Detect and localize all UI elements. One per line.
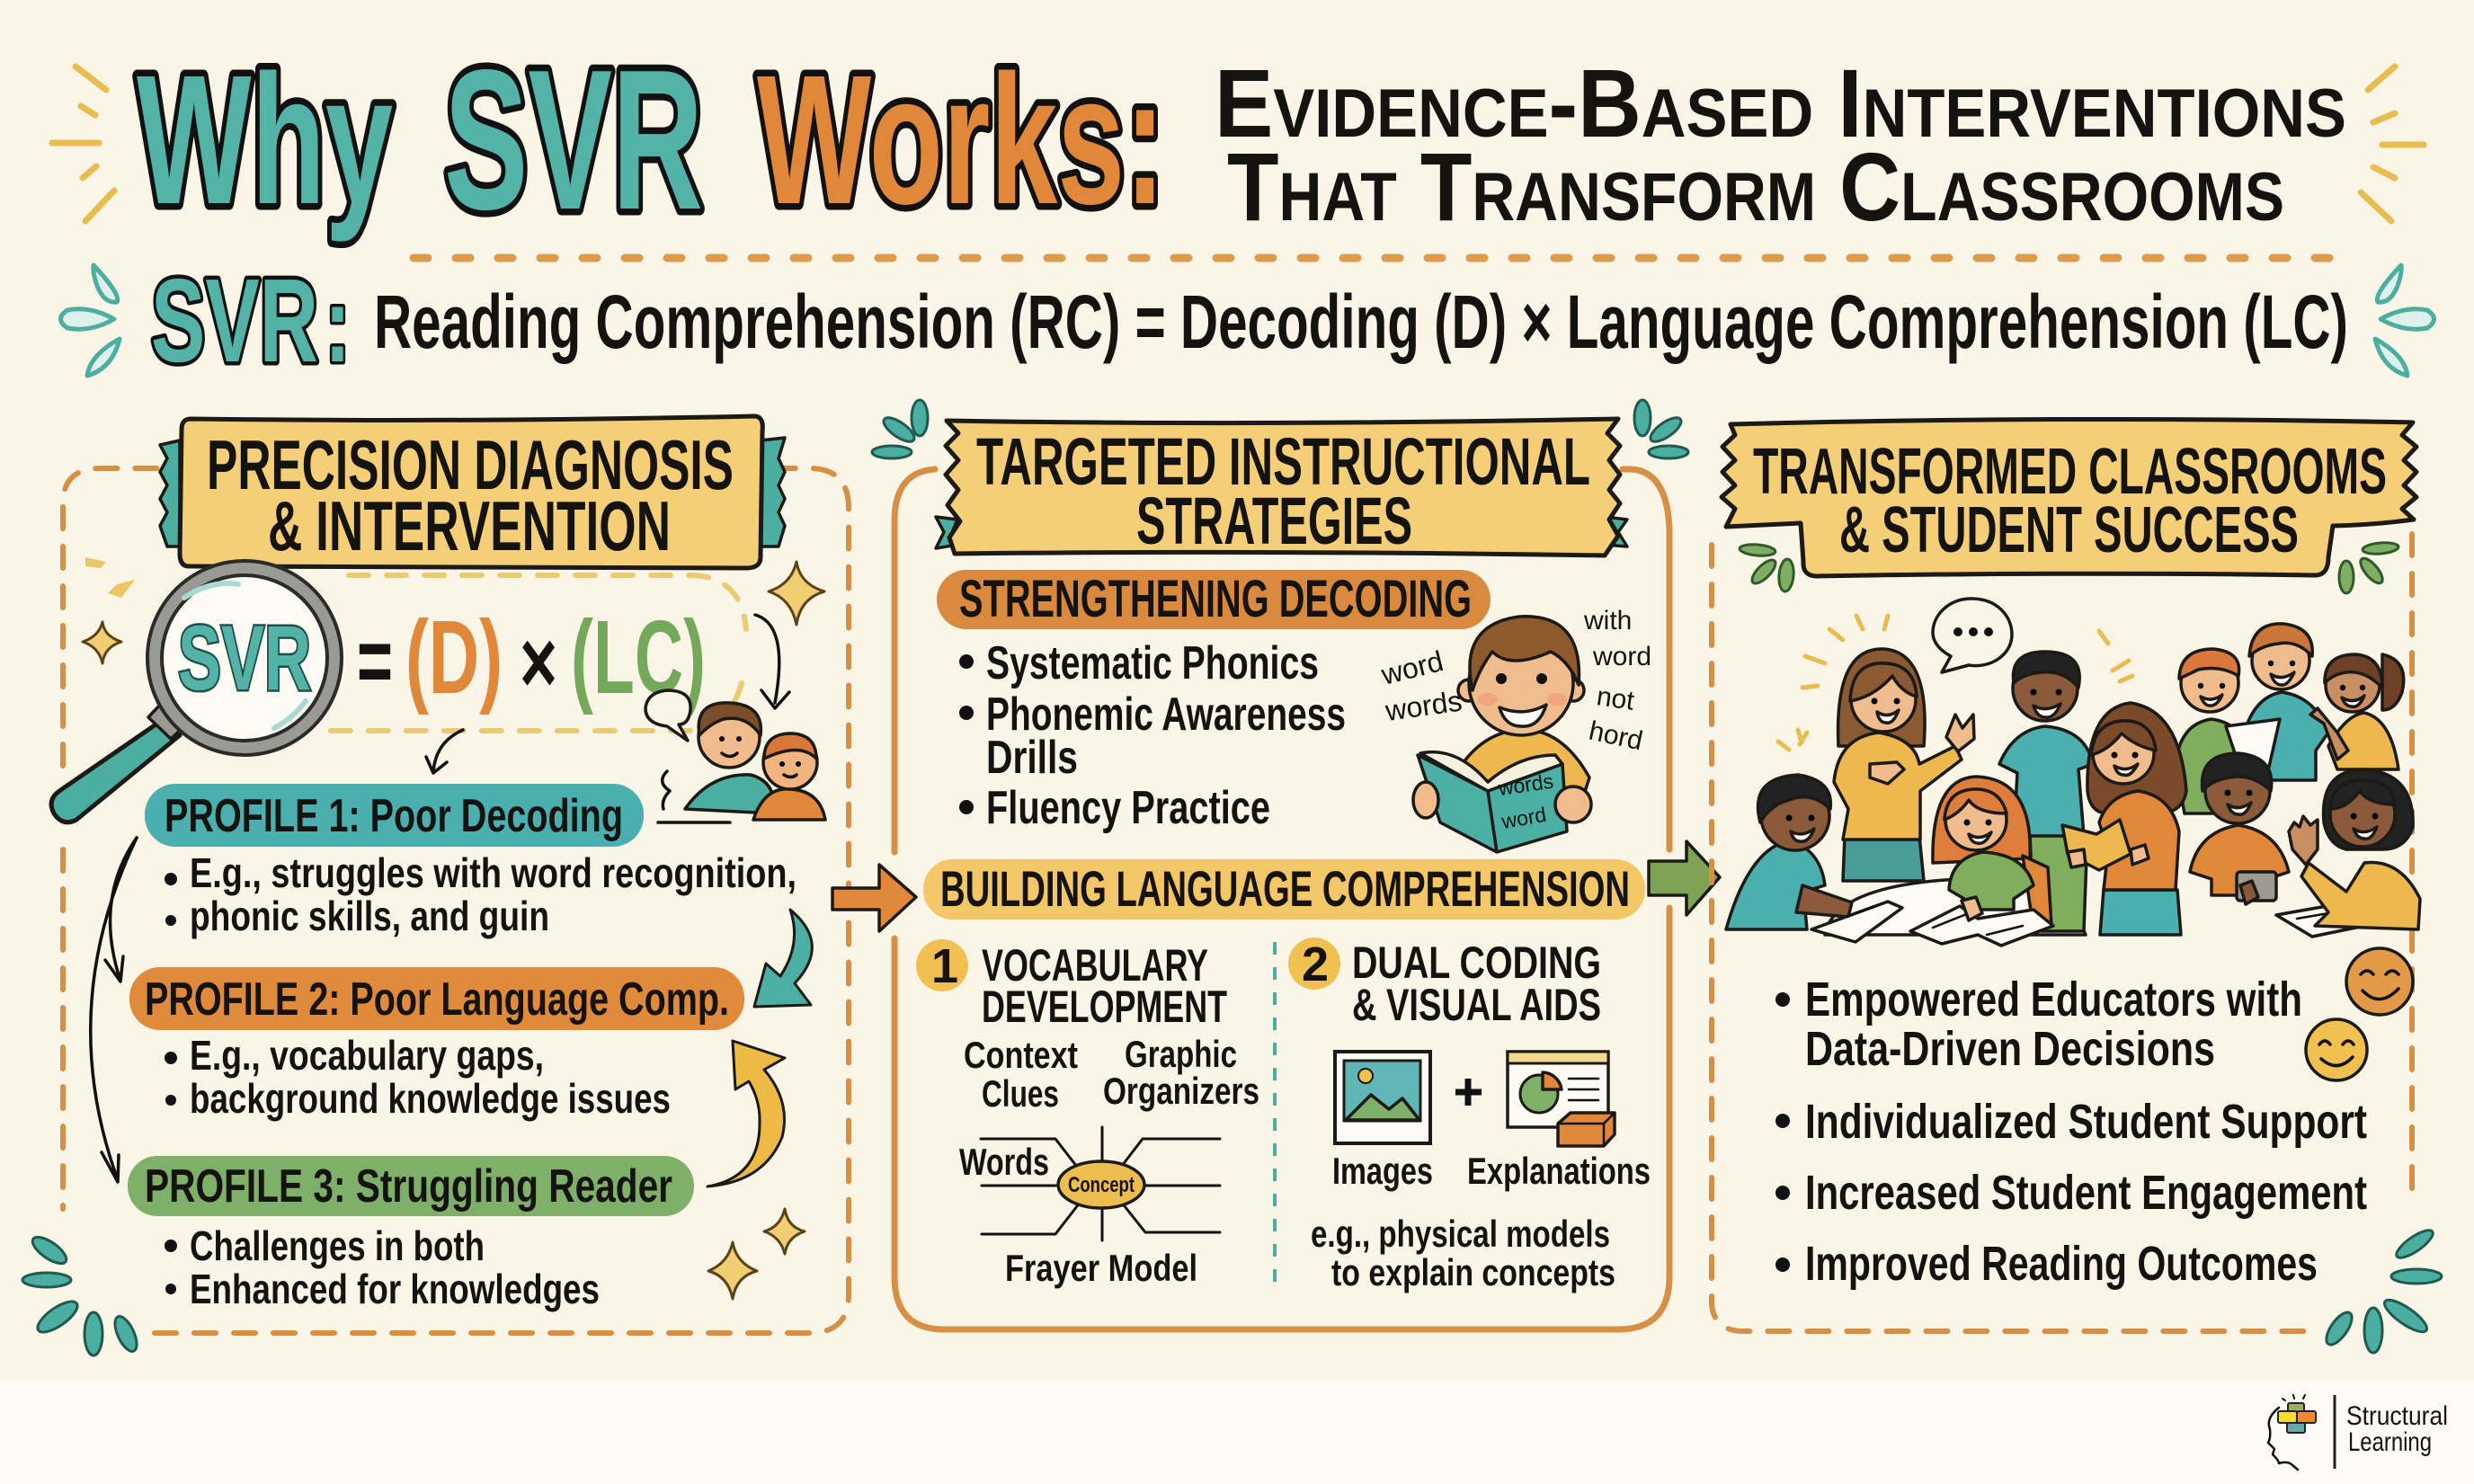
equation: (D) [405,599,503,715]
profile 1 details: phonic skills, and guin [190,893,549,939]
column: dual coding: Explanations [1467,1150,1651,1192]
decoding bullets: Systematic Phonics [986,637,1319,689]
column: vocabulary development: Context [964,1034,1078,1076]
icon: boy reading: word [1592,642,1651,671]
yellow dashed equation frame [328,575,746,731]
icon: magnifying glass [51,561,342,822]
title: subtitle [1215,49,2346,241]
icon: picture [1335,1052,1430,1143]
title rays [52,67,2424,221]
heading banner [1722,419,2416,576]
icon: boy reading: not [1595,681,1637,716]
column: dual coding [1288,937,1651,1293]
boy at table [1726,775,1852,929]
title: subtitle: That Transform Classrooms [1227,132,2284,241]
icon: boy reading: words [1496,769,1554,800]
arrows from equation [426,615,789,773]
profile 3: PROFILE 3: Struggling Reader [145,1160,672,1213]
title: why svr works: SVR [444,29,703,252]
profile 3 details: Challenges in both [190,1222,485,1269]
girl ponytail [2310,654,2404,769]
decoding bullets: Drills [986,732,1078,784]
corner leaves [22,1232,141,1355]
column: dual coding: DUAL CODING [1352,937,1601,988]
heading banner [936,419,1627,558]
decoding bullets: Fluency Practice [986,782,1270,834]
frayer model diagram: Concept [1068,1173,1135,1197]
column: vocabulary development [916,939,1259,1289]
formula sprays [61,265,2434,376]
icon: boy reading: hord [1587,716,1645,756]
outcome bullets [1775,973,2367,1291]
icon: smiley faces [2306,948,2413,1080]
logo: structural learning [2268,1395,2448,1470]
icon: teacher and child [645,690,825,822]
icon: boy reading: with [1583,606,1632,635]
logo head icon [2268,1395,2316,1470]
heading banner: & INTERVENTION [268,486,671,565]
open books on table [1811,897,2364,946]
building language comprehension pill [923,859,1645,920]
girl curly hair [2289,769,2420,929]
logo: structural learning: Learning [2348,1427,2432,1457]
illustration: classroom group [1726,599,2420,946]
profile 2 details [165,1032,671,1122]
yellow arrow [707,1041,785,1186]
outcome bullets: Data-Driven Decisions [1805,1022,2215,1076]
panel: transformed classrooms [1712,419,2442,1353]
profile 2 details: E.g., vocabulary gaps, [190,1032,544,1079]
column: vocabulary development: Graphic [1125,1033,1237,1075]
profile 2: PROFILE 2: Poor Language Comp. [145,973,729,1026]
panel 2 border [894,469,1669,1329]
decoding bullets: Phonemic Awareness [986,689,1346,741]
profile 2 details: background knowledge issues [190,1075,671,1122]
equation: (LC) [571,599,706,715]
profile 1: PROFILE 1: Poor Decoding [165,790,623,842]
panel 1 dashed border [63,468,849,1333]
flow arrow: panel 2 to panel 3 [1649,841,1720,915]
column: dual coding: to explain concepts [1331,1251,1615,1293]
title: why svr works: Why [137,37,393,243]
column: dual coding: 2 [1302,937,1329,991]
panel: targeted instructional strategies [872,400,1688,1329]
strengthening decoding pill: STRENGTHENING DECODING [959,570,1472,628]
outcome bullets: Empowered Educators with [1805,973,2302,1026]
top leaves [872,400,1688,458]
heading banner: STRATEGIES [1136,484,1412,558]
girl red hair [1933,777,2051,926]
title: why svr works: Works: [757,37,1165,243]
column: vocabulary development: Organizers [1103,1070,1259,1112]
table [1825,879,2086,935]
title: subtitle: Evidence-Based Interventions [1215,49,2346,157]
formula line: : [325,264,351,385]
column: dual coding: & VISUAL AIDS [1352,980,1601,1030]
equation [357,599,706,715]
panel 3 dashed border [1712,534,2412,1331]
profile link arrows [91,838,137,1182]
formula line [151,254,2348,387]
frayer model diagram: Frayer Model [1005,1247,1197,1289]
flow arrow: panel 1 to panel 2 [832,865,916,931]
boy with tablet [2190,753,2289,904]
girl with book [2062,703,2186,935]
profile 1 details: E.g., struggles with word recognition, [190,849,796,896]
column: dual coding: e.g., physical models [1311,1213,1610,1255]
column: vocabulary development: VOCABULARY [982,940,1208,991]
building language comprehension pill: BUILDING LANGUAGE COMPREHENSION [940,860,1630,917]
icon: boy reading [1377,606,1651,852]
frayer model diagram: Words [959,1141,1049,1183]
column: dual coding: Images [1332,1150,1433,1192]
icon: boy reading: word [1377,644,1446,691]
profile 1 [145,784,644,847]
profile 1 details [165,849,796,939]
outcome bullets: Improved Reading Outcomes [1805,1237,2318,1291]
title [137,29,2346,252]
teacher [1834,649,1974,881]
title: why svr works [137,29,1165,252]
formula line: SVR [151,254,318,387]
red-haired boy back left [2176,649,2239,813]
corner leaves [2322,1226,2442,1353]
icon: magnifying glass: SVR [178,607,311,709]
strengthening decoding pill [937,570,1491,629]
heading banner: TARGETED INSTRUCTIONAL [976,424,1590,499]
icon: explanation slide with model [1508,1052,1615,1146]
column: vocabulary development: DEVELOPMENT [982,982,1227,1032]
profile 3 details [165,1222,600,1312]
heading banner: PRECISION DIAGNOSIS [207,425,734,504]
column: vocabulary development: 1 [931,939,958,993]
heading leaves [1740,541,2398,593]
icon: boy reading: word [1499,803,1548,833]
frayer model diagram [959,1127,1220,1289]
icon: boy reading: words [1383,684,1464,727]
profile 3 details: Enhanced for knowledges [190,1266,600,1312]
panel: precision diagnosis [22,416,849,1355]
equation: = [357,609,393,714]
heading banner [160,416,785,568]
standing boy teal shirt [1999,652,2093,931]
teal arrow [754,910,812,1007]
icon: sparkle marks [83,557,824,1299]
logo: structural learning: Structural [2346,1401,2448,1431]
rays and speech bubble [1778,599,2132,750]
decoding bullets [959,637,1346,834]
boy top [2226,624,2328,780]
column: vocabulary development: Clues [982,1072,1059,1115]
equation: × [520,612,557,713]
profile 2 [129,967,744,1030]
